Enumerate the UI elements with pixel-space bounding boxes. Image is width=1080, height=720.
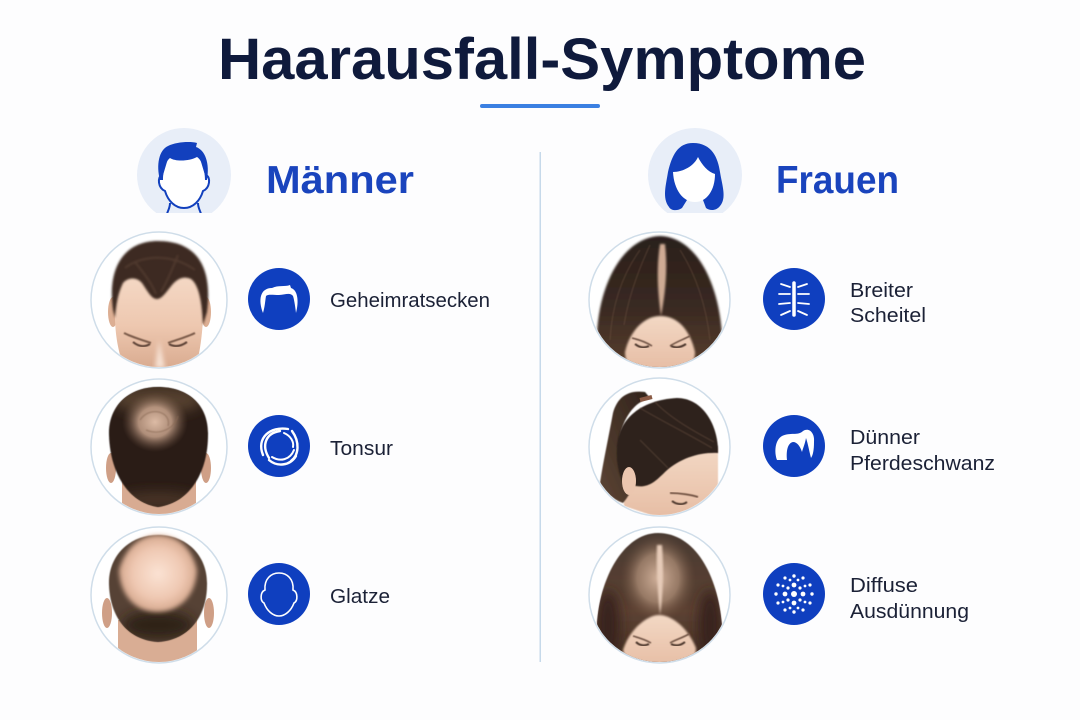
photo: diffuse thinning [589,527,730,668]
label: Scheitel [850,305,926,327]
label: Glatze [330,586,390,608]
icon: parting [763,268,825,330]
label [850,427,995,475]
icon: head outline [248,563,310,625]
photo: receding hairline [91,232,227,368]
row: Glatze [91,527,390,664]
title: Haarausfall-Symptome [218,27,866,92]
heading: Männer: Männer [266,159,414,202]
icon: ponytail [763,415,825,477]
photo: ponytail [589,378,730,518]
row: Diffuse Ausdünnung [589,527,969,668]
title underline [480,104,600,108]
center divider [540,152,541,662]
label: Pferdeschwanz [850,453,995,475]
label: Breiter [850,280,913,302]
label [850,280,926,327]
label [850,575,969,623]
icon: man avatar [137,128,231,222]
photo: bald head [91,527,227,664]
panel: men [91,128,490,664]
row: Geheimratsecken [91,232,490,368]
row: Tonsur [91,379,393,515]
label: Tonsur [330,438,393,460]
label: Ausdünnung [850,601,969,623]
row: Dünner Pferdeschwanz [589,378,995,518]
row: Breiter Scheitel [589,232,926,370]
heading: Frauen: Frauen [776,159,899,202]
icon: scattered dots [763,563,825,625]
icon: hairline [248,268,310,330]
photo: crown thinning [91,379,227,515]
icon: swirl [248,415,310,477]
label: Geheimratsecken [330,290,490,312]
label: Diffuse [850,575,918,597]
icon: woman avatar [648,128,742,222]
photo: wide parting [589,232,730,370]
panel: women [589,128,995,668]
label: Dünner [850,427,920,449]
